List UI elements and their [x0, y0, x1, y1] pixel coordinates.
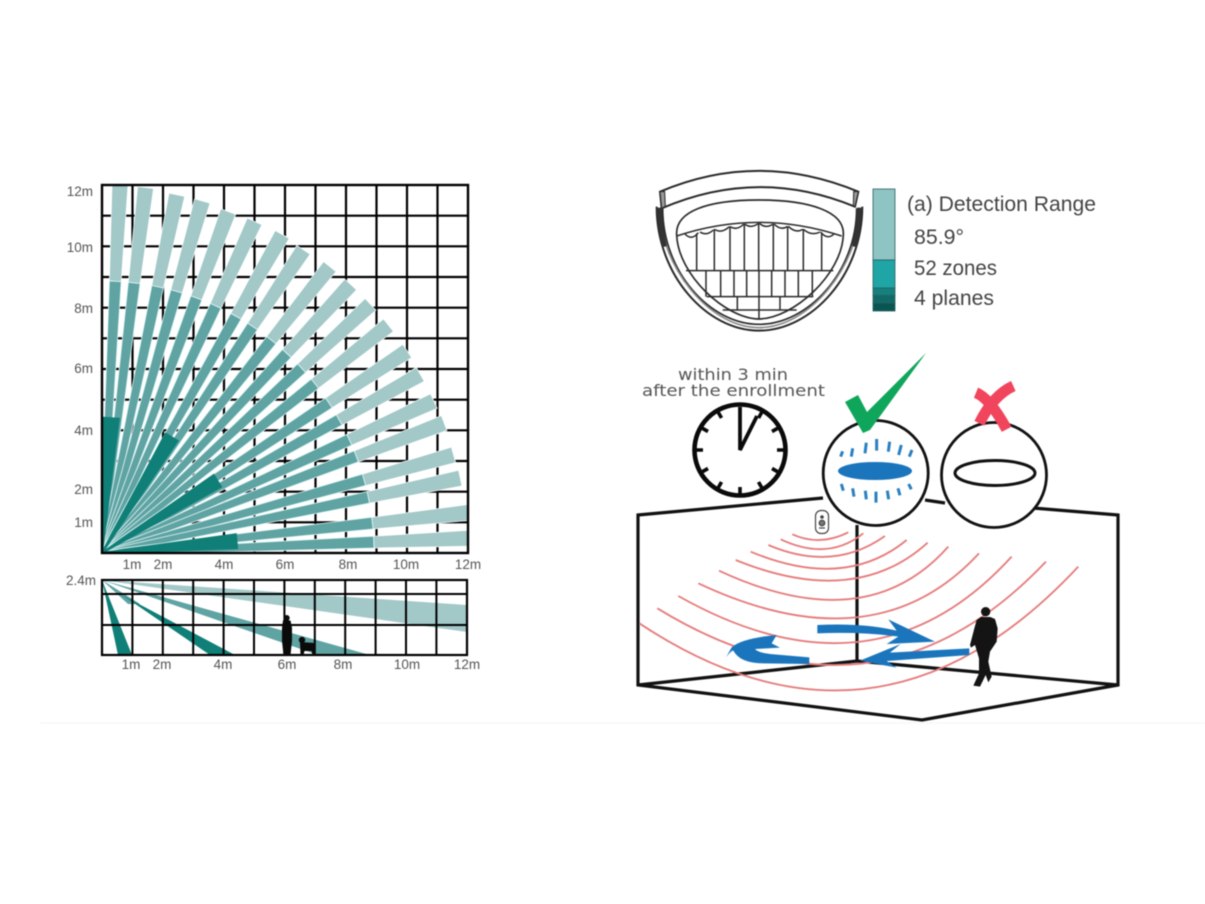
side view labels [66, 573, 480, 672]
top view grid [102, 185, 468, 553]
x axis labels: 8m [339, 557, 357, 572]
LED filled blue [838, 462, 912, 480]
lens zones [677, 222, 842, 319]
y axis labels: 12m [67, 184, 93, 199]
room scene [638, 498, 1118, 720]
side view labels: 2.4m [66, 573, 96, 588]
legend text: 52 zones [914, 257, 997, 280]
arrow: walking path upper [817, 619, 935, 644]
detection zones arcs [639, 532, 1078, 690]
legend text: 85.9° [914, 226, 964, 249]
arrow: walking path lower [860, 644, 969, 668]
legend text: (a) Detection Range [907, 193, 1096, 216]
icon: person [282, 615, 292, 655]
y axis labels: 2m [74, 482, 93, 497]
x axis labels: 2m [154, 557, 172, 572]
room outline [638, 498, 1118, 720]
legend colour bar [873, 189, 895, 311]
enrollment time caption: after the enrollment [642, 381, 825, 400]
icon: dog [299, 637, 316, 655]
icon: red cross mark [976, 386, 1013, 429]
icon: wall sensor [816, 510, 828, 534]
indicator: LED flashing correct [823, 420, 928, 526]
icon: clock [694, 404, 786, 496]
y axis labels: 6m [74, 361, 93, 376]
x axis labels [123, 557, 481, 572]
enrollment time caption [642, 365, 825, 400]
side view labels: 2m [153, 657, 171, 672]
side view labels: 1m [122, 657, 140, 672]
top view detection beams [94, 183, 472, 561]
side view labels: 4m [214, 657, 232, 672]
legend text [907, 193, 1096, 310]
LED empty ring [955, 460, 1035, 486]
icon: walking person [970, 607, 998, 687]
indicator: LED off incorrect [942, 422, 1046, 528]
side view labels: 10m [394, 657, 420, 672]
x axis labels: 6m [276, 557, 294, 572]
chart: side view detection coverage [66, 573, 480, 672]
LED rays [841, 439, 912, 503]
device: sensor lens diagram [657, 171, 862, 331]
icon: green check mark [845, 353, 926, 433]
device shell [657, 207, 862, 331]
y axis labels: 8m [74, 301, 93, 316]
device band end caps [660, 192, 858, 208]
side view beams [102, 580, 467, 655]
legend text: 4 planes [914, 287, 994, 310]
x axis labels: 1m [123, 557, 141, 572]
x axis labels: 4m [215, 557, 233, 572]
side view labels: 8m [334, 657, 352, 672]
side view labels: 6m [278, 657, 296, 672]
arrow: walking path left [726, 635, 809, 664]
device lens window [677, 200, 843, 319]
y axis labels [67, 184, 93, 530]
side view grid [102, 580, 467, 655]
chart: top view detection coverage [67, 183, 481, 572]
x axis labels: 12m [455, 557, 481, 572]
enrollment time caption: within 3 min [678, 365, 788, 384]
y axis labels: 4m [74, 423, 93, 438]
y axis labels: 10m [67, 240, 93, 255]
y axis labels: 1m [74, 515, 93, 530]
x axis labels: 10m [393, 557, 419, 572]
device top band [660, 171, 858, 208]
side view labels: 12m [454, 657, 480, 672]
